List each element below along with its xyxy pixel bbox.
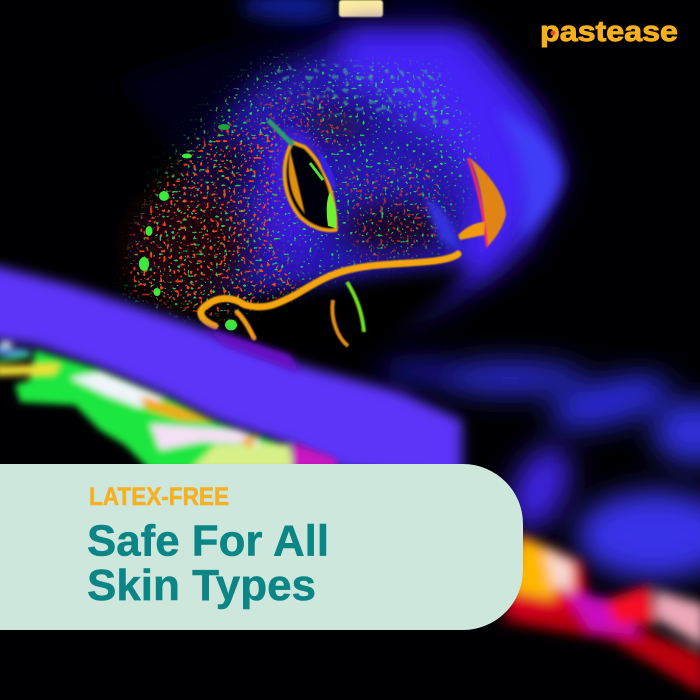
nose highlight xyxy=(495,110,562,240)
nostril xyxy=(425,198,458,250)
gold inner lid xyxy=(289,150,305,214)
forehead and nose glow xyxy=(262,30,550,280)
dark chin shadow xyxy=(250,265,470,350)
logo accent dot xyxy=(550,30,556,36)
eye highlights xyxy=(327,192,336,228)
magenta shadow on arm xyxy=(205,328,300,372)
panel: caption xyxy=(0,464,523,630)
lip paint xyxy=(458,158,506,247)
paint speckles xyxy=(115,48,490,330)
purple arm band xyxy=(0,262,462,480)
eye socket xyxy=(270,126,330,214)
eyebrow: latex-free: LATEX-FREE xyxy=(89,483,229,511)
bright yellow highlight at top xyxy=(339,0,383,17)
dark speckled cheek xyxy=(128,111,447,303)
yellow branch by mouth xyxy=(237,312,254,338)
logo: pastease: pastease xyxy=(540,16,678,48)
eye lid outline xyxy=(284,142,336,230)
heading: safe for all skin types: Skin Types xyxy=(87,561,316,610)
neon strip bottom right xyxy=(495,532,700,695)
eye xyxy=(268,120,336,230)
yellow paint line along jaw xyxy=(201,254,458,326)
heading: safe for all skin types: Safe For All xyxy=(87,516,329,566)
hair shadow and top glow xyxy=(120,0,460,160)
right blurred hand blobs xyxy=(380,362,700,579)
large green paint dots xyxy=(139,124,237,330)
chin paint streaks xyxy=(332,282,364,346)
head base xyxy=(180,35,565,320)
neon strip on arm xyxy=(0,341,340,470)
